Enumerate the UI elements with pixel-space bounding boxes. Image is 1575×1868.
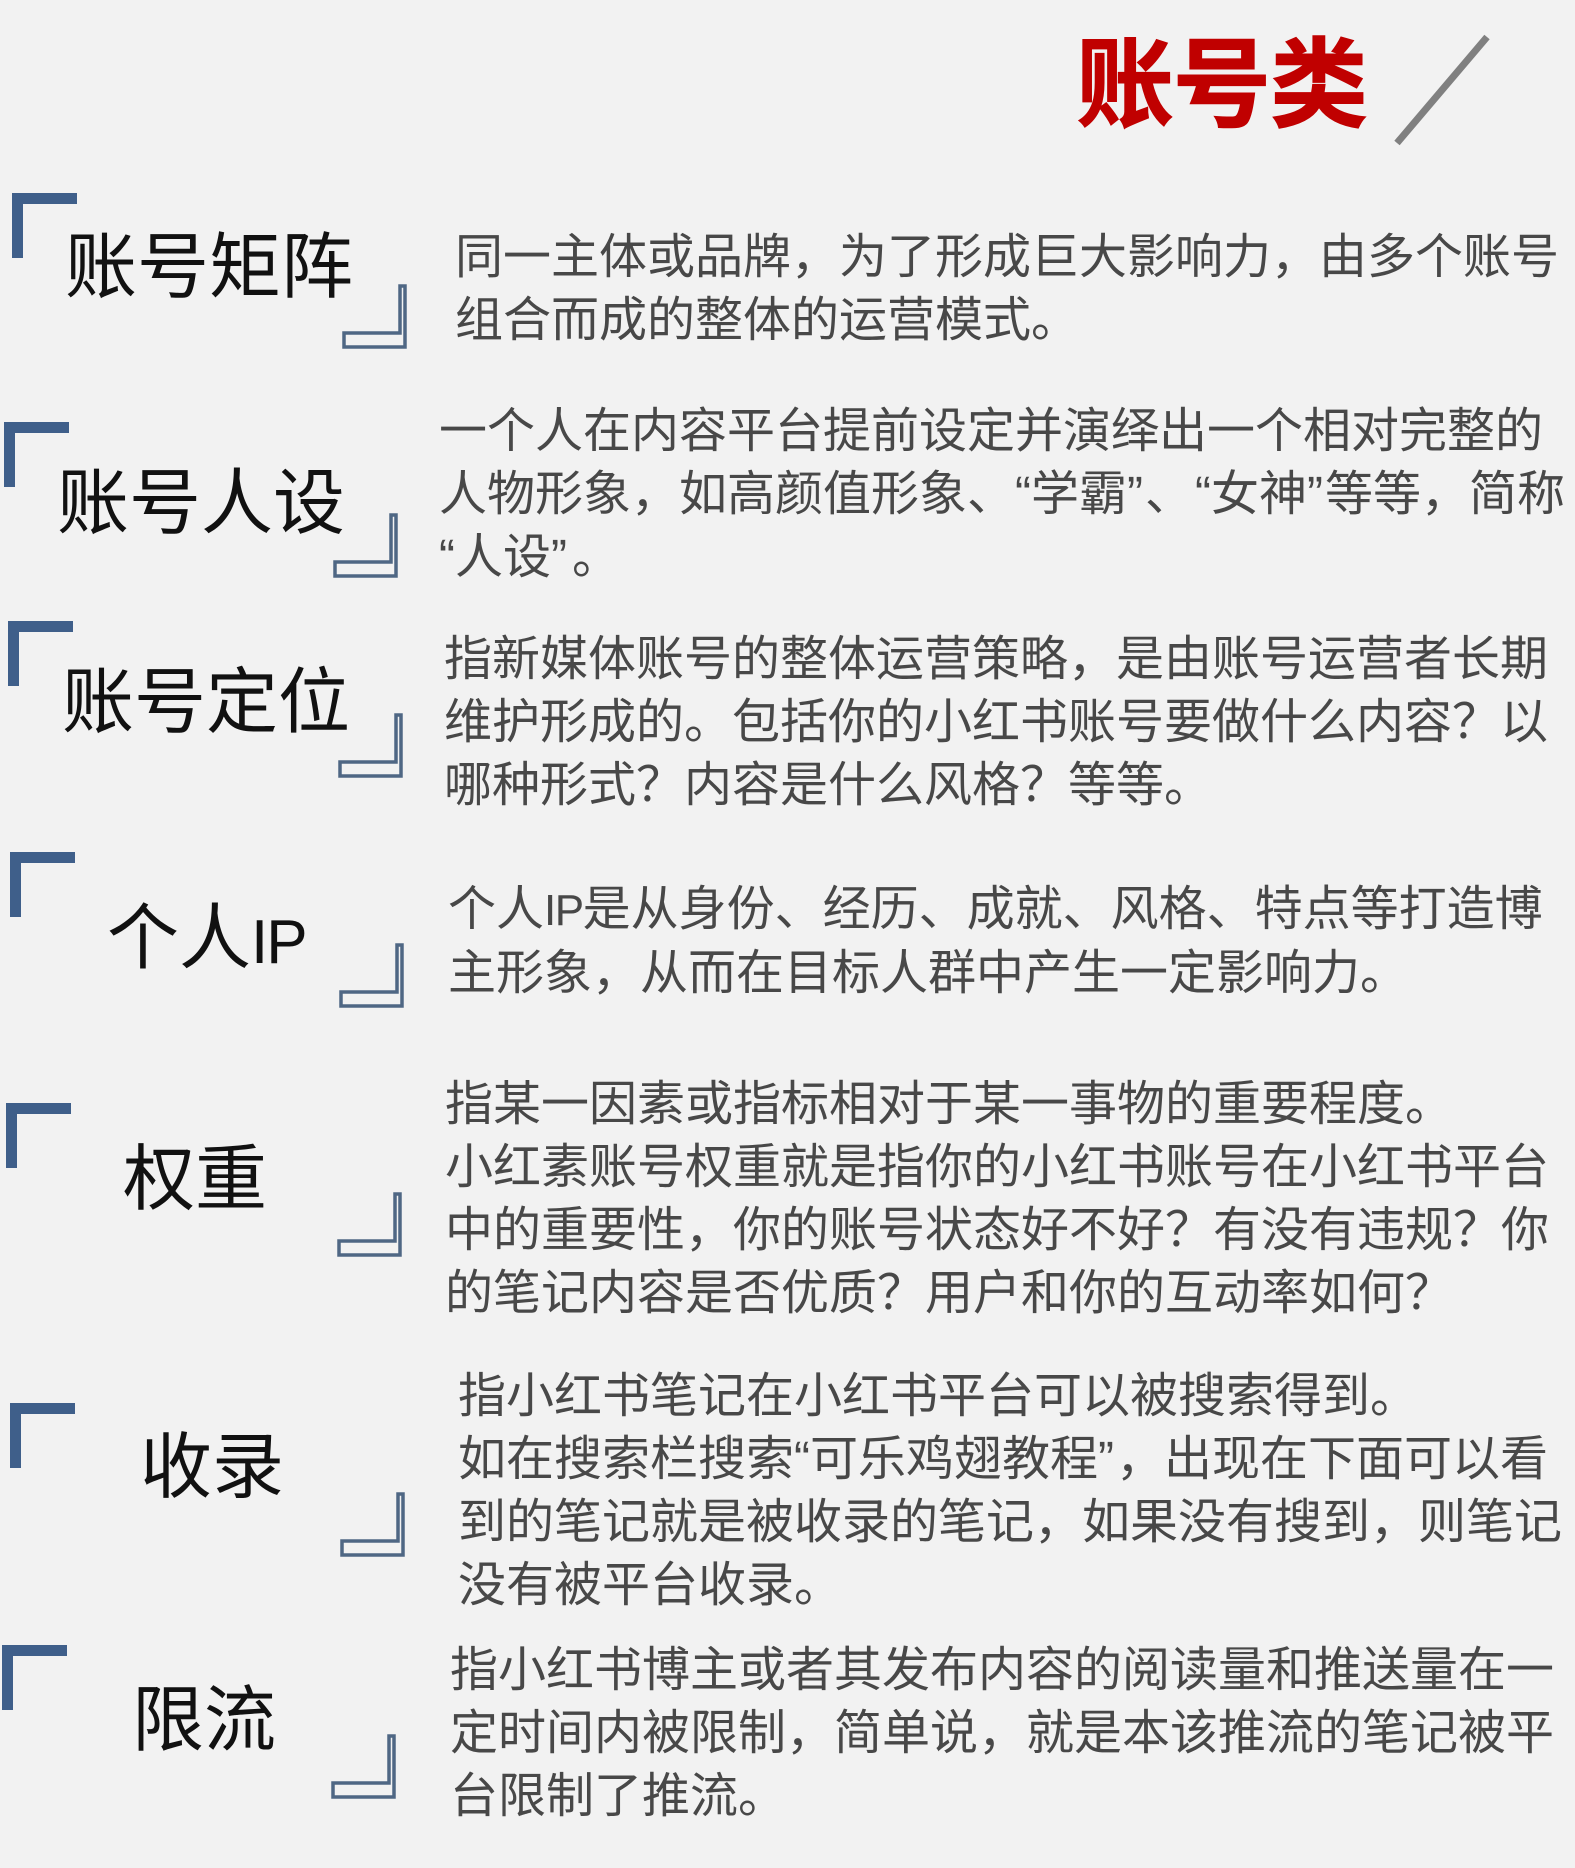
definition text: “人设”。 (439, 531, 620, 584)
bracket bottom-right (339, 943, 404, 1008)
definition text: 个人IP是从身份、经历、成就、风格、特点等打造博 (448, 883, 1543, 936)
term label: 收录 (140, 1428, 284, 1508)
definition text: 维护形成的。包括你的小红书账号要做什么内容？以 (444, 696, 1548, 749)
definition text: 定时间内被限制，简单说，就是本该推流的笔记被平 (450, 1707, 1554, 1760)
definition text: 没有被平台收录。 (458, 1559, 842, 1612)
definition text (445, 1078, 1549, 1320)
bracket bottom-right (333, 513, 398, 578)
bracket top-left (2, 1645, 67, 1710)
definition text: 如在搜索栏搜索“可乐鸡翅教程”，出现在下面可以看 (458, 1433, 1548, 1486)
term label: 账号定位 (62, 663, 350, 743)
bracket top-left (10, 852, 75, 917)
term label: 账号矩阵 (65, 228, 353, 308)
definition text (448, 883, 1543, 1000)
definition text: 组合而成的整体的运营模式。 (455, 294, 1079, 347)
bracket bottom-right (331, 1734, 396, 1799)
panel: 收录 (10, 1370, 1562, 1612)
bracket top-left (12, 193, 77, 258)
definition text: 人物形象，如高颜值形象、“学霸”、“女神”等等，简称 (439, 468, 1565, 521)
definition text: 小红素账号权重就是指你的小红书账号在小红书平台 (445, 1141, 1549, 1194)
bracket top-left (6, 1103, 71, 1168)
bracket top-left (10, 1403, 75, 1468)
definition text (458, 1370, 1562, 1612)
definition text (439, 405, 1565, 584)
definition text: 指新媒体账号的整体运营策略，是由账号运营者长期 (444, 633, 1548, 686)
definition text: 台限制了推流。 (450, 1770, 786, 1823)
decorative slash next to title (1394, 34, 1490, 146)
bracket top-left (8, 621, 73, 686)
panel: 账号人设 (4, 405, 1565, 584)
definition text: 同一主体或品牌，为了形成巨大影响力，由多个账号 (455, 231, 1559, 284)
term label: 账号人设 (57, 464, 345, 544)
definition text: 一个人在内容平台提前设定并演绎出一个相对完整的 (439, 405, 1543, 458)
definition text (455, 231, 1559, 347)
definition text: 哪种形式？内容是什么风格？等等。 (444, 759, 1212, 812)
term label: 限流 (132, 1681, 276, 1761)
definition text: 指某一因素或指标相对于某一事物的重要程度。 (445, 1078, 1453, 1131)
bracket bottom-right (342, 284, 407, 349)
definition text (444, 633, 1548, 812)
bracket top-left (4, 422, 69, 487)
definition text: 的笔记内容是否优质？用户和你的互动率如何？ (445, 1267, 1453, 1320)
panel: 权重 (6, 1078, 1549, 1320)
bracket bottom-right (337, 1192, 402, 1257)
title: 账号类 (1076, 30, 1367, 140)
definition text (450, 1644, 1554, 1823)
bracket bottom-right (340, 1492, 405, 1557)
panel: 个人IP (10, 852, 1543, 1008)
panel: 限流 (2, 1644, 1554, 1823)
definition text: 指小红书笔记在小红书平台可以被搜索得到。 (458, 1370, 1418, 1423)
term label: 个人IP (107, 899, 306, 979)
panel: 账号矩阵 (12, 193, 1559, 349)
bracket bottom-right (338, 713, 403, 778)
definition text: 指小红书博主或者其发布内容的阅读量和推送量在一 (450, 1644, 1554, 1697)
definition text: 到的笔记就是被收录的笔记，如果没有搜到，则笔记 (458, 1496, 1562, 1549)
definition text: 主形象，从而在目标人群中产生一定影响力。 (448, 947, 1408, 1000)
term label: 权重 (123, 1140, 267, 1220)
panel: 账号定位 (8, 621, 1548, 812)
definition text: 中的重要性，你的账号状态好不好？有没有违规？你 (445, 1204, 1549, 1257)
